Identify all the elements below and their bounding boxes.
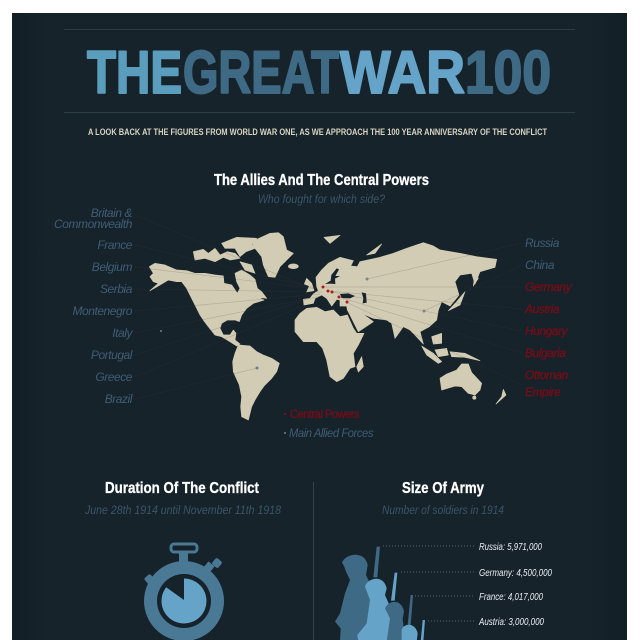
title: GREAT bbox=[183, 39, 339, 106]
allied labels left: Brazil bbox=[105, 392, 133, 406]
subheading: dates: June 28th 1914 until November 11th 1918 bbox=[84, 503, 281, 517]
allied labels left: Britain & bbox=[91, 206, 132, 220]
heading: allies and central powers: The Allies And The Central Powers bbox=[214, 172, 429, 189]
army values: Austria: 3,000,000 bbox=[478, 617, 544, 628]
caspian sea bbox=[362, 292, 367, 303]
allied labels left bbox=[54, 206, 133, 406]
heading: size of army: Size Of Army bbox=[402, 480, 484, 497]
svalbard bbox=[324, 235, 340, 243]
labels right: Bulgaria bbox=[525, 346, 566, 360]
title bbox=[87, 39, 551, 106]
allied labels left: Commonwealth bbox=[54, 217, 133, 231]
subheading: number of soldiers: Number of soldiers in 1914 bbox=[382, 503, 504, 517]
title: 100 bbox=[465, 39, 551, 106]
allied labels left: Italy bbox=[112, 326, 133, 340]
uk bbox=[304, 278, 314, 292]
allied labels left: Serbia bbox=[100, 282, 133, 296]
australia bbox=[440, 364, 482, 395]
labels right: Empire bbox=[525, 385, 561, 399]
north america bbox=[149, 263, 267, 346]
labels right: Germany bbox=[525, 280, 573, 294]
labels right: Russia bbox=[525, 236, 560, 250]
connector lines bbox=[135, 215, 522, 399]
eurasia bbox=[303, 243, 497, 344]
allied labels left: Portugal bbox=[91, 348, 133, 362]
legend: Main Allied Forces bbox=[289, 426, 373, 440]
icon: stopwatch bbox=[144, 544, 224, 640]
dotted leaders bbox=[383, 546, 474, 621]
allied labels left: Belgium bbox=[92, 260, 132, 274]
allied labels left: Greece bbox=[95, 370, 133, 384]
allied labels left: Montenegro bbox=[72, 304, 133, 318]
labels right: Austria bbox=[524, 302, 560, 316]
tasmania bbox=[473, 396, 476, 399]
army values bbox=[478, 542, 552, 628]
header bbox=[64, 29, 575, 113]
sakhalin bbox=[473, 273, 478, 286]
africa bbox=[295, 307, 364, 382]
legend: Central Powers bbox=[290, 407, 359, 421]
map markers bbox=[160, 278, 426, 370]
south america bbox=[233, 345, 279, 420]
legend bbox=[284, 407, 373, 440]
title: THE bbox=[87, 39, 182, 106]
baltic sea bbox=[325, 268, 340, 284]
subheading: who fought: Who fought for which side? bbox=[258, 192, 385, 206]
army values: Russia: 5,971,000 bbox=[479, 542, 542, 553]
allied labels left: France bbox=[97, 238, 133, 252]
labels right: China bbox=[525, 258, 555, 272]
labels right: Hungary bbox=[525, 324, 569, 338]
labels right: Ottoman bbox=[525, 368, 569, 382]
greenland bbox=[252, 233, 293, 277]
army values: Germany: 4,500,000 bbox=[479, 568, 552, 579]
madagascar bbox=[357, 357, 363, 372]
novaya zemlya bbox=[367, 244, 382, 255]
new zealand bbox=[496, 389, 506, 404]
iceland bbox=[288, 264, 298, 269]
southeast asia islands bbox=[422, 333, 480, 363]
japan bbox=[448, 292, 465, 311]
title: WAR bbox=[340, 39, 465, 106]
canadian arctic islands bbox=[193, 248, 240, 262]
world map bbox=[149, 233, 506, 420]
vertical divider bbox=[313, 482, 314, 640]
labels right bbox=[524, 236, 573, 399]
army values: France: 4,017,000 bbox=[479, 592, 543, 603]
army chart bbox=[335, 542, 552, 640]
soldier silhouettes bbox=[335, 547, 425, 640]
black sea bbox=[340, 293, 355, 298]
heading: duration: Duration Of The Conflict bbox=[105, 480, 260, 497]
